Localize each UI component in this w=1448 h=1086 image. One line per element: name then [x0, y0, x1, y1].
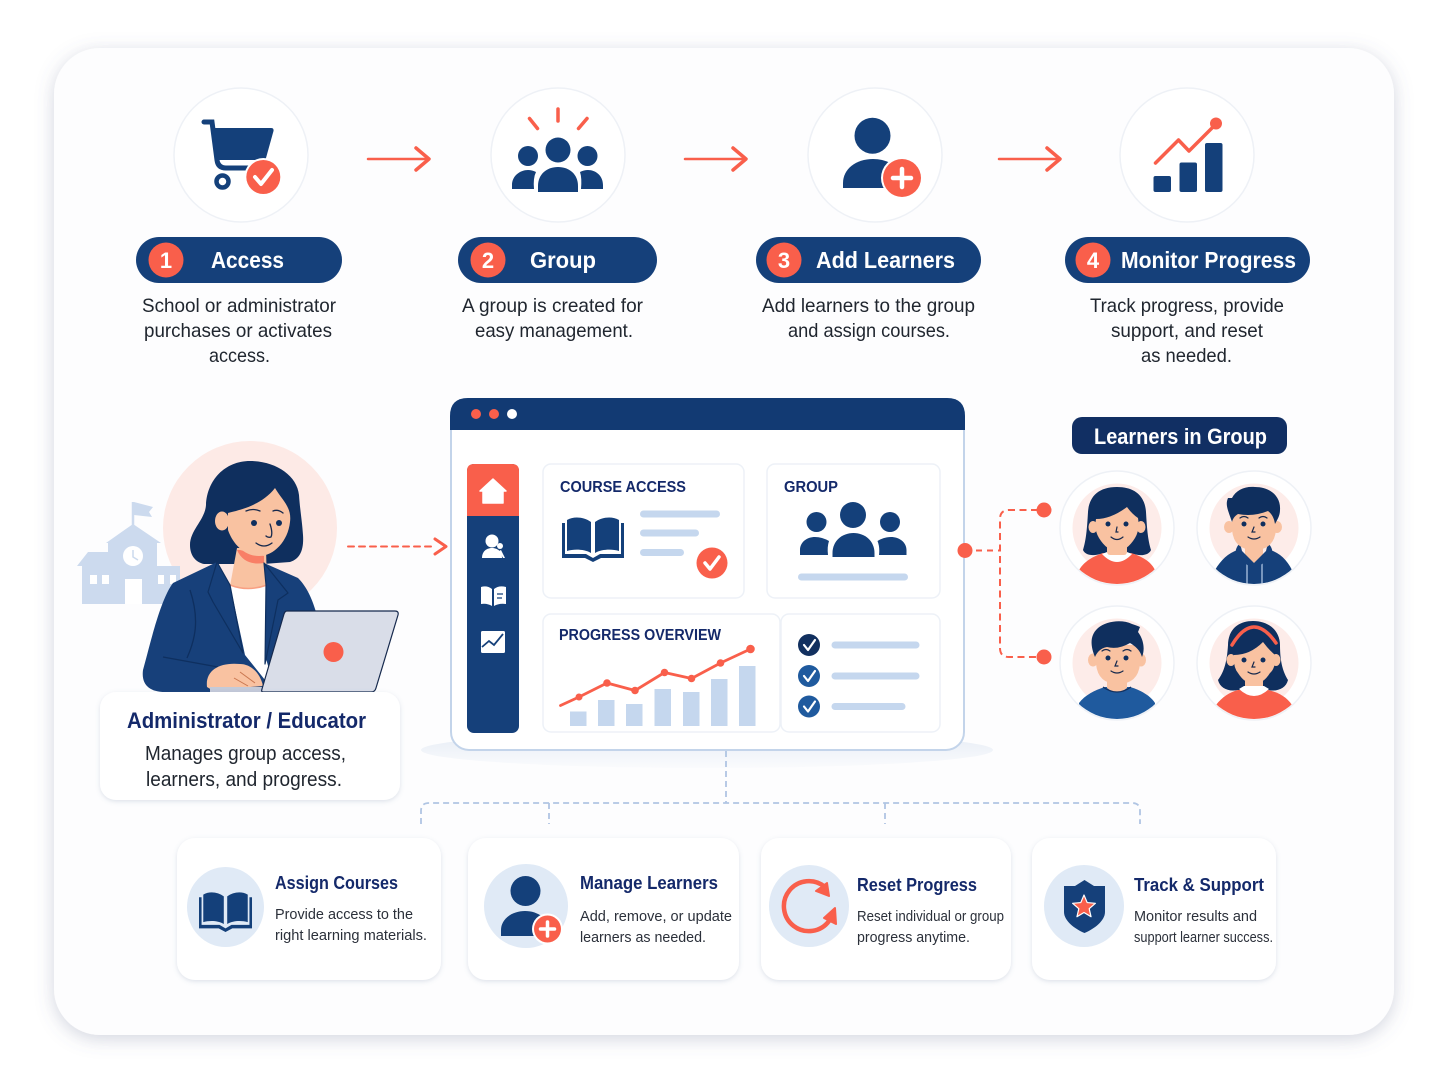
card: track & support — [1032, 838, 1276, 980]
description: access: purchases or activates — [144, 320, 332, 342]
card: assign courses: Assign Courses — [275, 873, 398, 893]
card: reset progress: Reset individual or group — [857, 908, 1004, 925]
step label: monitor progress: Monitor Progress — [1121, 247, 1296, 273]
hand — [207, 664, 263, 690]
back hair — [190, 461, 303, 564]
icon: book — [481, 586, 506, 606]
description: group — [462, 295, 643, 342]
title bar — [450, 398, 965, 430]
icon: chart — [481, 631, 505, 653]
icon: reset arrows — [769, 865, 849, 947]
blazer — [143, 562, 316, 692]
sidebar — [467, 464, 519, 733]
dashed arrow to dashboard — [348, 539, 446, 554]
dashboard window — [450, 398, 965, 750]
platform shadow — [421, 732, 993, 768]
bar chart — [570, 666, 756, 726]
step label: group: Group — [530, 247, 596, 273]
neck — [230, 548, 267, 589]
icon: shield with star — [1044, 865, 1124, 947]
step label: group — [458, 237, 657, 283]
shirt — [230, 585, 268, 680]
step 4: monitor progress — [1065, 88, 1310, 367]
description: monitor progress: as needed. — [1141, 345, 1232, 367]
panel: checklist — [781, 614, 940, 732]
description: access: School or administrator — [142, 295, 336, 317]
icon: rising bar chart — [1120, 88, 1254, 222]
panel: progress overview — [543, 614, 780, 732]
icon: people — [482, 534, 505, 558]
panel: group: GROUP — [784, 479, 838, 496]
card: manage learners: learners as needed. — [580, 929, 706, 946]
heading: learners in group — [1072, 417, 1287, 454]
card: reset progress — [761, 838, 1011, 980]
step label: access: 1 — [160, 248, 172, 273]
description: add learners: and assign courses. — [788, 320, 950, 342]
card: assign courses: Provide access to the — [275, 906, 413, 923]
panel: progress overview: PROGRESS OVERVIEW — [559, 627, 721, 644]
icon: open book — [562, 518, 624, 562]
description: monitor progress: Track progress, provide — [1090, 295, 1284, 317]
icon: person with plus — [484, 864, 568, 948]
card: manage learners: Manage Learners — [580, 873, 718, 893]
caption: administrator / educator: Manages group access, — [145, 743, 346, 765]
description: add learners: Add learners to the group — [762, 295, 975, 317]
step label: access — [136, 237, 342, 283]
dashed tree connector to actions — [421, 751, 1140, 824]
description: access: access. — [209, 345, 270, 367]
step label: add learners — [756, 237, 981, 283]
card: track & support: support learner success. — [1134, 929, 1273, 946]
laptop — [210, 687, 264, 692]
step label: monitor progress — [1065, 237, 1310, 283]
face — [215, 512, 229, 530]
description: access — [142, 295, 336, 367]
icon: open book — [187, 867, 264, 947]
line chart — [560, 645, 755, 706]
step 2: group — [458, 88, 657, 342]
card: reset progress: Reset Progress — [857, 875, 977, 895]
description: monitor progress — [1090, 295, 1284, 367]
panel: group — [767, 464, 940, 598]
arrow — [999, 148, 1060, 170]
icon: person with plus — [808, 88, 942, 222]
step label: group: 2 — [482, 248, 494, 273]
card: track & support: Monitor results and — [1134, 908, 1257, 925]
step label: add learners: 3 — [778, 248, 790, 273]
card: track & support: Track & Support — [1134, 875, 1264, 895]
icon: school building — [77, 502, 180, 604]
illustration: administrator at laptop — [77, 441, 398, 692]
avatar: girl with headband — [1197, 606, 1311, 725]
icon: home — [480, 479, 506, 503]
panel: course access: COURSE ACCESS — [560, 479, 686, 496]
step label: add learners: Add Learners — [816, 247, 955, 273]
caption: administrator / educator: Administrator / Educator — [127, 708, 366, 733]
icon: group — [800, 502, 906, 557]
step label: access: Access — [211, 247, 284, 273]
avatar: boy in blue shirt — [1060, 606, 1174, 725]
card: manage learners — [468, 838, 739, 980]
avatar: boy in navy hoodie — [1197, 471, 1311, 590]
step 1: access — [136, 88, 342, 367]
icon: group of people — [491, 88, 625, 222]
heading: learners in group: Learners in Group — [1094, 424, 1267, 449]
description: monitor progress: support, and reset — [1111, 320, 1264, 342]
description: group: A group is created for — [462, 295, 643, 317]
panel: course access — [543, 464, 744, 598]
step label: monitor progress: 4 — [1087, 248, 1100, 273]
card: assign courses — [177, 838, 441, 980]
card: assign courses: right learning materials. — [275, 927, 427, 944]
description: add learners — [762, 295, 975, 342]
caption: administrator / educator — [100, 692, 400, 800]
icon: check badge — [696, 548, 728, 578]
connector: dashboard to learners — [958, 502, 1052, 664]
arrow — [685, 148, 746, 170]
caption: administrator / educator: learners, and progress. — [146, 769, 342, 791]
description: group: easy management. — [475, 320, 633, 342]
card: manage learners: Add, remove, or update — [580, 908, 732, 925]
avatar: girl in red shirt — [1060, 471, 1174, 590]
arrow — [368, 148, 429, 170]
icon: shopping cart with check — [174, 88, 308, 222]
card: reset progress: progress anytime. — [857, 929, 970, 946]
step 3: add learners — [756, 88, 981, 342]
